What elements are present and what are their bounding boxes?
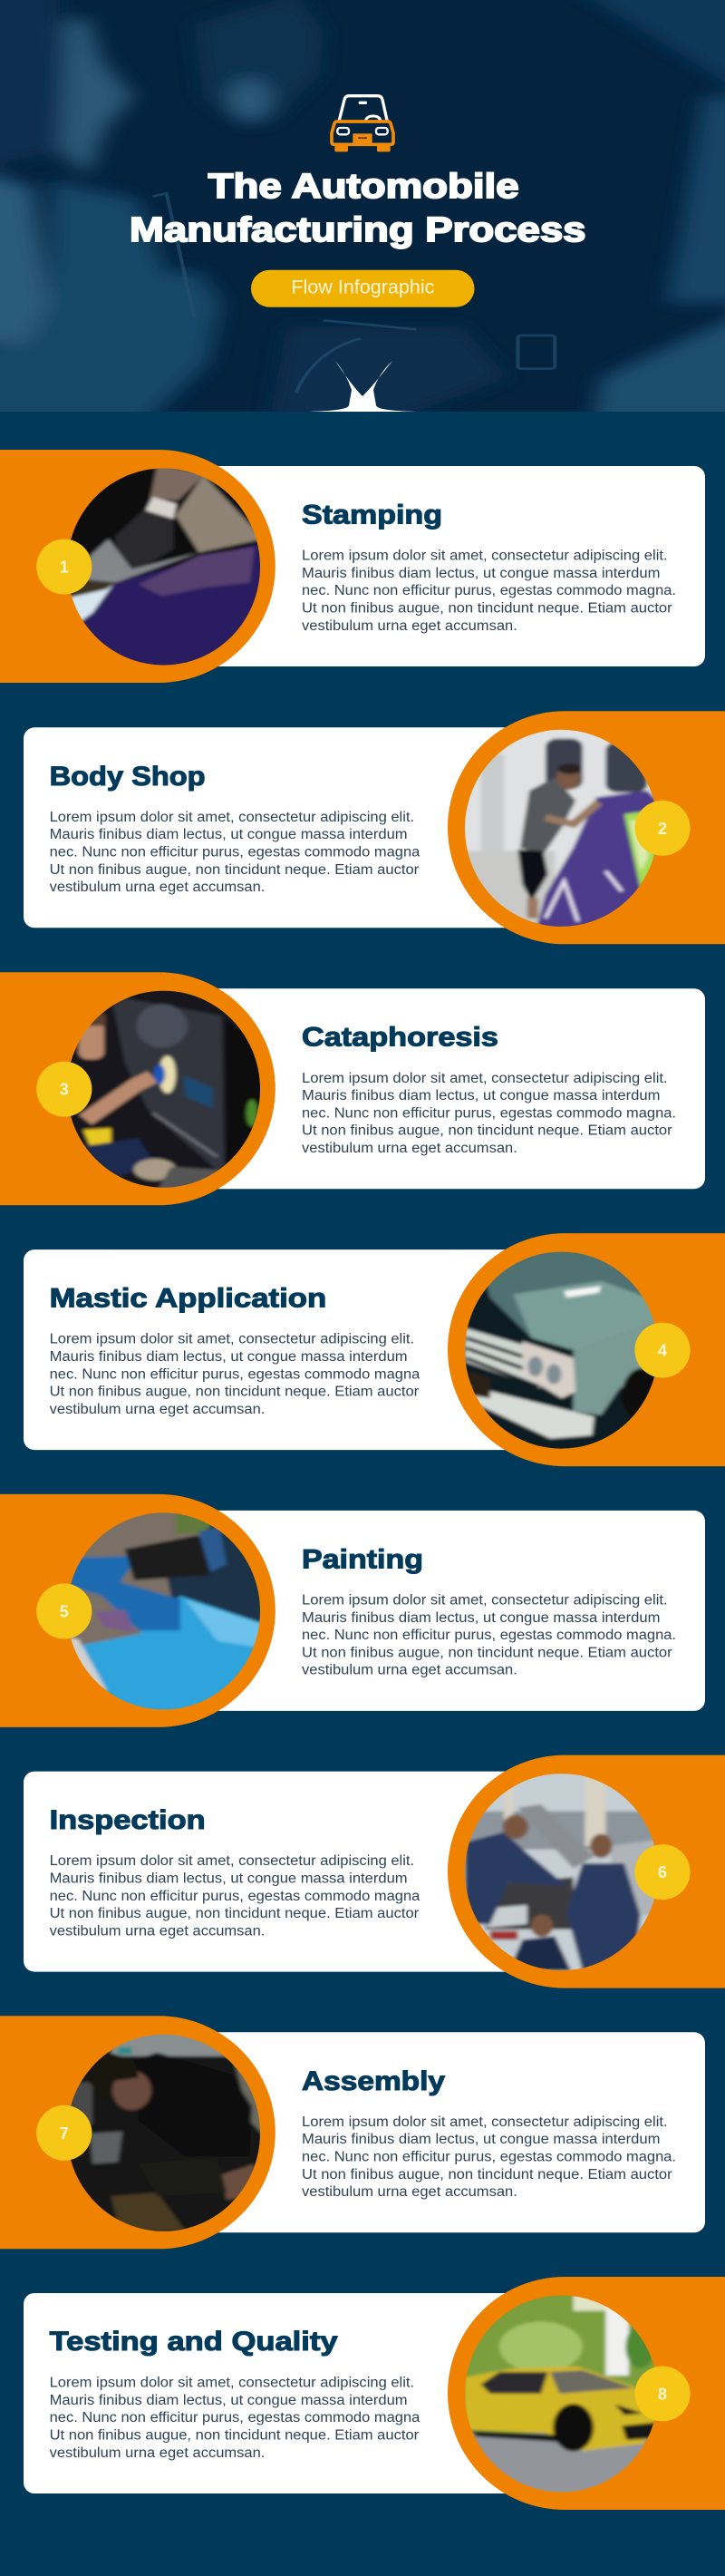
body text [50, 810, 420, 895]
card [136, 2032, 705, 2232]
body text [302, 1592, 676, 1678]
card [136, 466, 705, 666]
heading: Stamping [302, 501, 442, 530]
body text: Ut non finibus augue, non tincidunt neque. Etiam auctor [50, 2428, 419, 2443]
orange panel [0, 1494, 276, 1727]
heading: Cataphoresis [302, 1023, 498, 1053]
body text: Lorem ipsum dolor sit amet, consectetur adipiscing elit. [50, 810, 414, 825]
body text: Mauris finibus diam lectus, ut congue massa interdum [50, 1349, 408, 1365]
star shape [310, 361, 416, 412]
body text: Ut non finibus augue, non tincidunt neque. Etiam auctor [302, 600, 672, 617]
body text [302, 1071, 676, 1156]
body text: nec. Nunc non efficitur purus, egestas commodo magna. [302, 2150, 676, 2165]
body text: Mauris finibus diam lectus, ut congue massa interdum [302, 2132, 660, 2147]
card [24, 2293, 567, 2493]
hero header [0, 0, 725, 429]
step 4: Mastic Application [24, 1233, 725, 1466]
orange panel [448, 711, 725, 944]
card [24, 727, 567, 928]
number badge [36, 539, 92, 595]
step 7: Assembly [0, 2016, 705, 2249]
title: Manufacturing Process [130, 211, 585, 249]
card [136, 988, 705, 1189]
body text [302, 2114, 676, 2200]
photo: yellow sports car [465, 2296, 654, 2492]
step 1: Stamping [0, 450, 705, 683]
photo: gloved hand peeling blue film [71, 1512, 260, 1710]
photo: man working on purple car [465, 729, 654, 927]
body text: Lorem ipsum dolor sit amet, consectetur adipiscing elit. [302, 1071, 668, 1086]
body text: Lorem ipsum dolor sit amet, consectetur adipiscing elit. [50, 1332, 414, 1347]
photo: mechanic working on engine [71, 2035, 260, 2231]
body text: nec. Nunc non efficitur purus, egestas commodo magna [50, 1889, 420, 1904]
orange panel [0, 450, 276, 683]
body text: Mauris finibus diam lectus, ut congue massa interdum [302, 1610, 660, 1626]
body text: nec. Nunc non efficitur purus, egestas commodo magna. [302, 1105, 676, 1121]
number badge [36, 1583, 92, 1638]
card [24, 1249, 567, 1450]
body text: vestibulum urna eget accumsan. [302, 1141, 517, 1156]
hero background photo [0, 0, 725, 429]
body text [50, 2376, 420, 2461]
body text: Lorem ipsum dolor sit amet, consectetur adipiscing elit. [50, 1853, 414, 1869]
number badge [634, 801, 691, 856]
body text: vestibulum urna eget accumsan. [302, 2184, 517, 2200]
body text: vestibulum urna eget accumsan. [50, 1402, 265, 1417]
number badge [634, 1323, 691, 1378]
photo: man polishing dark car [71, 990, 260, 1188]
number badge: 6 [658, 1863, 667, 1881]
body text: nec. Nunc non efficitur purus, egestas commodo magna [50, 844, 420, 860]
card [24, 1772, 567, 1972]
step 3: Cataphoresis [0, 972, 705, 1205]
number badge: 3 [60, 1081, 69, 1099]
number badge: 5 [60, 1602, 69, 1620]
heading: Inspection [50, 1805, 206, 1835]
body text: Ut non finibus augue, non tincidunt neque. Etiam auctor [50, 1385, 419, 1400]
body text: Lorem ipsum dolor sit amet, consectetur adipiscing elit. [302, 1593, 668, 1609]
body text: nec. Nunc non efficitur purus, egestas commodo magna [50, 1366, 420, 1382]
orange panel [448, 2277, 725, 2510]
body text: Ut non finibus augue, non tincidunt neque. Etiam auctor [302, 1123, 672, 1139]
orange panel [0, 2016, 276, 2249]
body text: Lorem ipsum dolor sit amet, consectetur adipiscing elit. [302, 549, 668, 564]
engine highlights [152, 193, 555, 393]
number badge: 7 [60, 2124, 69, 2143]
number badge: 4 [658, 1342, 667, 1360]
icon: car [332, 96, 393, 151]
number badge [634, 1844, 691, 1900]
body text [50, 1332, 420, 1417]
orange panel [448, 1233, 725, 1466]
body text: Lorem ipsum dolor sit amet, consectetur adipiscing elit. [50, 2376, 414, 2391]
heading: Mastic Application [50, 1284, 326, 1314]
body text [302, 549, 676, 634]
body text: vestibulum urna eget accumsan. [50, 1923, 265, 1939]
photo: squeegee on purple wrap [71, 468, 260, 666]
body text: vestibulum urna eget accumsan. [50, 2445, 265, 2461]
heading: Testing and Quality [50, 2327, 338, 2357]
number badge: 2 [658, 820, 667, 838]
body text: Ut non finibus augue, non tincidunt neque. Etiam auctor [50, 862, 419, 878]
photo: mechanics inspecting race car [465, 1774, 654, 1971]
body text: Lorem ipsum dolor sit amet, consectetur adipiscing elit. [302, 2114, 668, 2130]
body text: Ut non finibus augue, non tincidunt neque. Etiam auctor [50, 1906, 419, 1921]
body text: Mauris finibus diam lectus, ut congue massa interdum [302, 566, 660, 581]
card [136, 1511, 705, 1711]
number badge [36, 2105, 92, 2161]
body text: Ut non finibus augue, non tincidunt neque. Etiam auctor [302, 1645, 672, 1660]
number badge: 1 [60, 559, 69, 577]
body text: vestibulum urna eget accumsan. [302, 1663, 517, 1678]
number badge [36, 1062, 92, 1117]
number badge [634, 2367, 691, 2421]
body text: vestibulum urna eget accumsan. [302, 618, 517, 634]
subtitle pill: Flow Infographic [291, 277, 434, 297]
step 5: Painting [0, 1494, 705, 1727]
body text: Mauris finibus diam lectus, ut congue massa interdum [302, 1088, 660, 1103]
title [130, 168, 585, 249]
body text: Mauris finibus diam lectus, ut congue massa interdum [50, 2393, 408, 2408]
heading: Body Shop [50, 762, 206, 792]
body text: nec. Nunc non efficitur purus, egestas commodo magna. [302, 1628, 676, 1643]
body text: nec. Nunc non efficitur purus, egestas commodo magna [50, 2410, 420, 2425]
number badge: 8 [658, 2385, 667, 2403]
photo: vintage green truck [465, 1251, 654, 1449]
orange panel [448, 1755, 725, 1988]
step 6: Inspection [24, 1755, 725, 1988]
body text: Ut non finibus augue, non tincidunt neque. Etiam auctor [302, 2167, 672, 2182]
body text: Mauris finibus diam lectus, ut congue massa interdum [50, 827, 408, 842]
step 8: Testing and Quality [24, 2277, 725, 2510]
heading: Assembly [302, 2066, 445, 2096]
step 2: Body Shop [24, 711, 725, 944]
body text: Mauris finibus diam lectus, ut congue massa interdum [50, 1871, 408, 1886]
subtitle pill [251, 270, 475, 307]
heading: Painting [302, 1544, 423, 1574]
orange panel [0, 972, 276, 1205]
body text [50, 1853, 420, 1939]
body text: vestibulum urna eget accumsan. [50, 880, 265, 895]
body text: nec. Nunc non efficitur purus, egestas commodo magna. [302, 583, 676, 598]
title: The Automobile [208, 168, 519, 206]
